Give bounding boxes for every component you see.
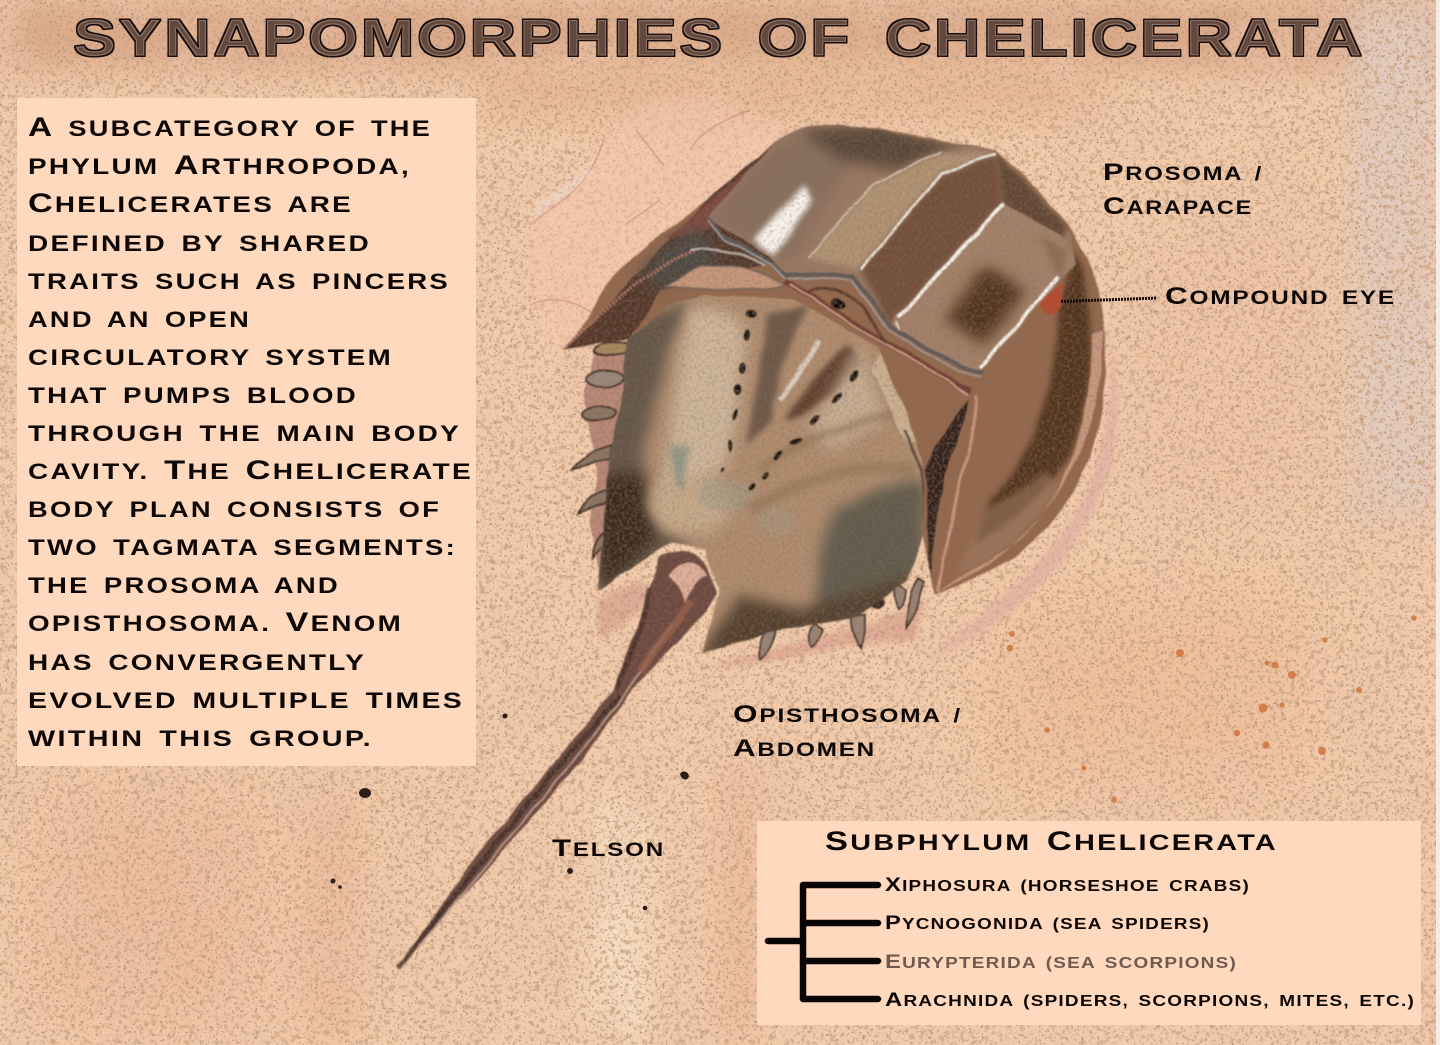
description text [28, 112, 473, 751]
median eye [829, 297, 847, 311]
label: opisthosoma / abdomen: O PISTHOSOMA / [733, 701, 962, 728]
description text: THE PROSOMA AND [28, 573, 340, 598]
description text: CIRCULATORY SYSTEM [28, 345, 393, 370]
leader line: compound eye [1061, 298, 1157, 302]
description text: TRAITS SUCH AS PINCERS [28, 269, 450, 294]
description text: AND AN OPEN [28, 307, 251, 332]
carapace plates [700, 120, 1080, 380]
bottom marginal spines [759, 578, 923, 659]
description text: BODY PLAN CONSISTS OF [28, 497, 441, 522]
label: prosoma / carapace [1103, 159, 1263, 220]
telson tail spine [398, 552, 717, 968]
taxon: Xiphosura: XIPHOSURA (HORSESHOE CRABS) [885, 874, 1250, 896]
cladogram tree [768, 885, 878, 999]
description text: THROUGH THE MAIN BODY [28, 421, 461, 446]
description text: TWO TAGMATA SEGMENTS: [28, 535, 457, 560]
left marginal spines [573, 340, 633, 558]
description text: HAS CONVERGENTLY [28, 650, 366, 675]
panel: phylogeny [757, 821, 1421, 1025]
panel: description [17, 98, 476, 766]
description text: A SUBCATEGORY OF THE [28, 112, 432, 142]
label: telson: TELSON [552, 835, 665, 862]
label: opisthosoma / abdomen [733, 701, 962, 762]
taxon: Arachnida: ARACHNIDA (SPIDERS, SCORPIONS, MITES, ETC.) [885, 989, 1415, 1011]
taxon: Pycnogonida: PYCNOGONIDA (SEA SPIDERS) [885, 912, 1210, 934]
label: opisthosoma / abdomen: A BDOMEN [733, 735, 876, 762]
title: SYNAPOMORPHIES OF CHELICERATA [73, 9, 1365, 68]
prosoma carapace shell [555, 120, 1115, 610]
description text: DEFINED BY SHARED [28, 231, 371, 256]
phylogeny heading: SUBPHYLUM C HELICERATA [825, 826, 1278, 856]
description text: C HELICERATES ARE [28, 188, 353, 218]
description text: PHYLUM A RTHROPODA, [28, 150, 411, 180]
horseshoe crab illustration [398, 120, 1115, 968]
label: prosoma / carapace: CARAPACE [1103, 193, 1253, 220]
pale fossil rock halo behind the animal [530, 94, 1118, 668]
taxon: Eurypterida: EURYPTERIDA (SEA SCORPIONS) [885, 951, 1237, 973]
small dark pits in the rock [330, 714, 689, 910]
dark entapophyses dot rows [720, 311, 861, 492]
median hinge and ocelli ridge [708, 217, 984, 396]
label: compound eye: C OMPOUND EYE [1165, 283, 1396, 310]
label: prosoma / carapace: PROSOMA / [1103, 159, 1263, 186]
description text: OPISTHOSOMA. VENOM [28, 607, 403, 637]
description text: WITHIN THIS GROUP. [28, 726, 373, 751]
opisthosoma abdomen [590, 290, 935, 660]
left hinge flap [563, 249, 785, 350]
description text: CAVITY. THE C HELICERATE [28, 455, 473, 485]
description text: THAT PUMPS BLOOD [28, 383, 358, 408]
left fringe behind spines [584, 340, 630, 570]
description text: EVOLVED MULTIPLE TIMES [28, 688, 464, 713]
compound eye [1041, 284, 1062, 316]
